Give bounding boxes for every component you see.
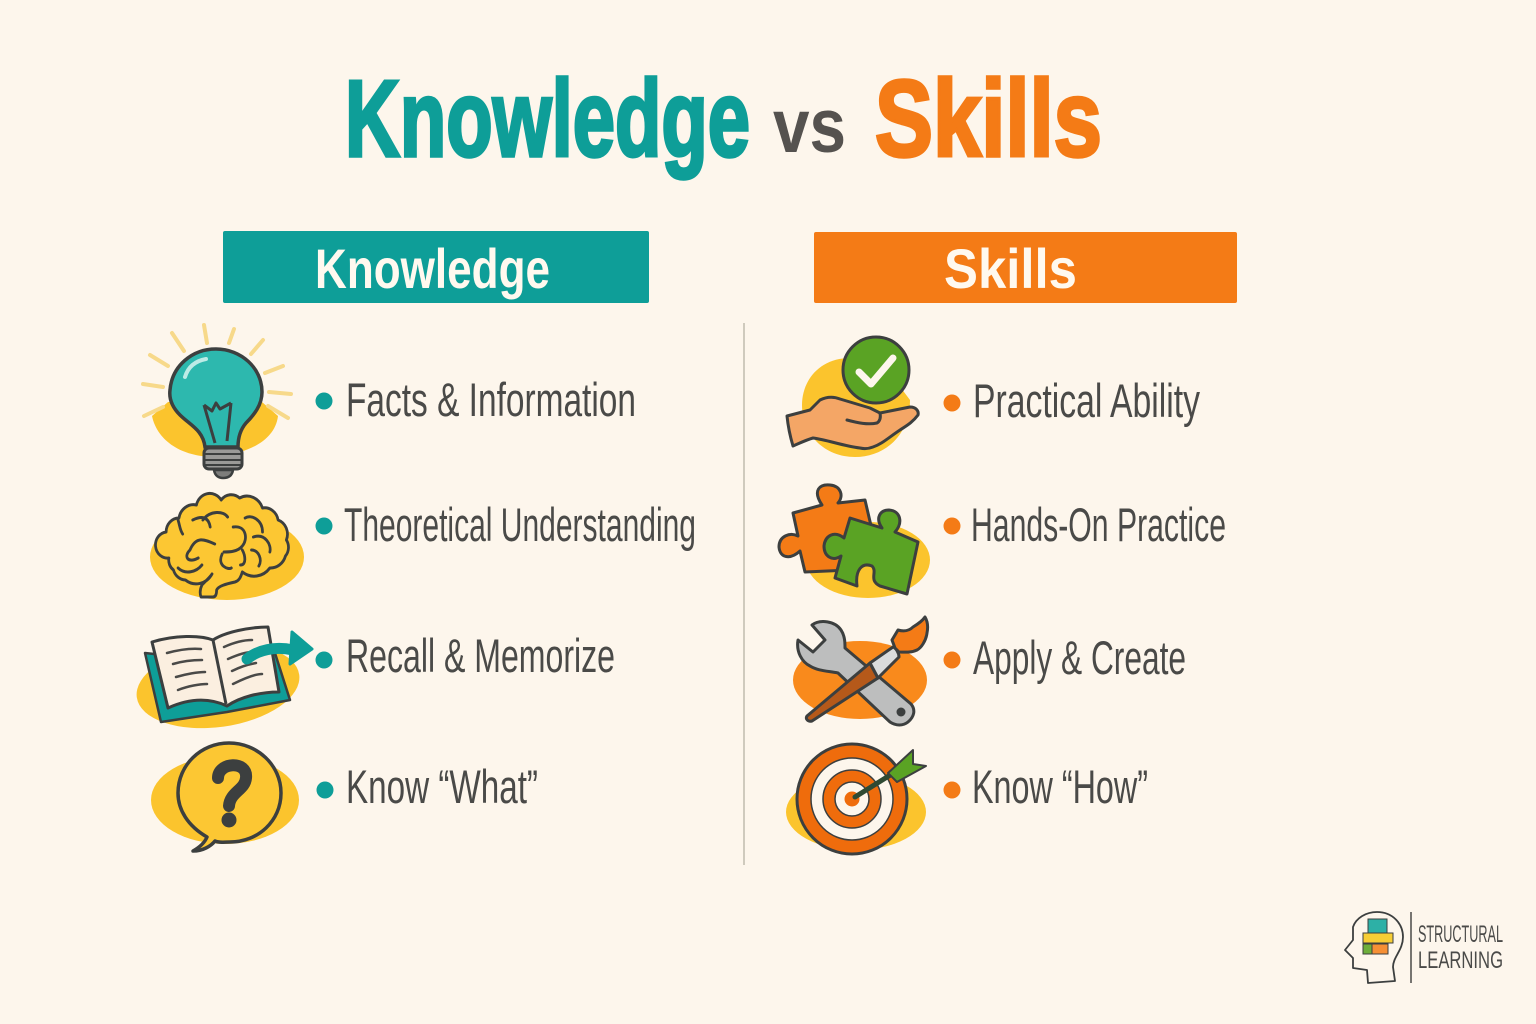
icon: target with arrow	[786, 744, 926, 854]
text: Theoretical Understanding	[344, 498, 696, 551]
bullet	[316, 782, 334, 798]
text: Hands-On Practice	[971, 498, 1226, 551]
title: vs	[773, 84, 846, 169]
text: Recall & Memorize	[346, 629, 615, 682]
icon: wrench and brush	[793, 617, 928, 725]
text: Facts & Information	[346, 373, 636, 426]
icon: puzzle pieces	[779, 485, 930, 598]
heading: knowledge: Knowledge	[315, 237, 550, 300]
panel: knowledge list	[131, 325, 696, 851]
title: Skills	[875, 58, 1102, 180]
heading: skills	[814, 232, 1237, 303]
text: Know “How”	[972, 760, 1148, 813]
text: Apply & Create	[973, 631, 1186, 684]
bullet	[316, 518, 332, 534]
title: Knowledge	[345, 58, 750, 180]
bullet	[944, 782, 960, 798]
bullet	[944, 652, 960, 668]
bullet	[316, 392, 332, 410]
icon: light bulb	[143, 325, 291, 478]
icon: open book	[131, 627, 312, 738]
text: Know “What”	[346, 760, 538, 813]
icon: question bubble	[151, 743, 299, 851]
logo: structural learning	[1345, 912, 1503, 983]
text: Practical Ability	[973, 374, 1200, 427]
bullet	[944, 394, 960, 412]
icon: brain	[150, 493, 304, 600]
panel: skills list	[779, 337, 1226, 854]
bullet	[316, 652, 332, 668]
heading: knowledge	[223, 231, 649, 303]
heading: skills: Skills	[944, 237, 1077, 300]
bullet	[944, 518, 960, 534]
icon: hand with check	[787, 337, 918, 457]
